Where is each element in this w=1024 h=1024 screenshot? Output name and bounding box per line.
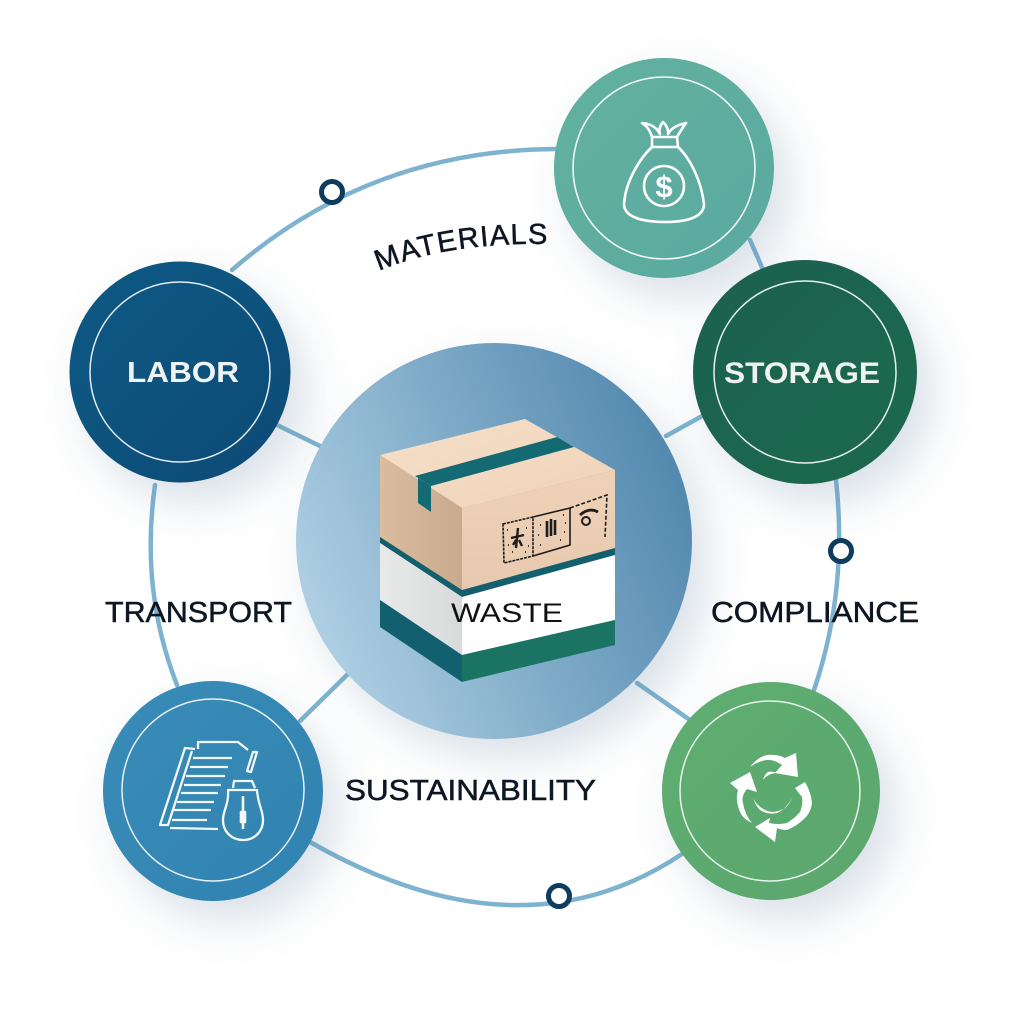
text: labor: LABOR: [127, 357, 239, 389]
icon: box handling stamps: [503, 495, 607, 563]
icon: money bag: [624, 122, 704, 222]
panel: storage circle: [693, 260, 917, 484]
panel: recycle icon circle: [662, 682, 880, 900]
connecting ring and spokes: [151, 149, 839, 905]
text: dollar sign: $: [655, 169, 673, 204]
text: waste: WASTE: [451, 598, 563, 628]
panel: central waste circle: [296, 343, 692, 739]
node dot: bottom: [548, 886, 570, 906]
label: compliance: COMPLIANCE: [711, 597, 919, 629]
label: transport: TRANSPORT: [105, 597, 292, 629]
panel: transport icon circle: [103, 681, 323, 901]
panel: labor circle: [70, 262, 290, 482]
panel: materials circle: [554, 58, 774, 278]
label: sustainability: SUSTAINABILITY: [345, 775, 596, 807]
node dot: top left: [322, 182, 342, 202]
text: storage: STORAGE: [724, 357, 880, 390]
node dot: right: [830, 540, 852, 562]
icon: cardboard box labelled waste: [380, 419, 615, 682]
icon: document and light bulb: [160, 742, 263, 840]
icon: recycling arrows: [730, 753, 812, 842]
label: materials: MATERIALS: [374, 223, 546, 270]
